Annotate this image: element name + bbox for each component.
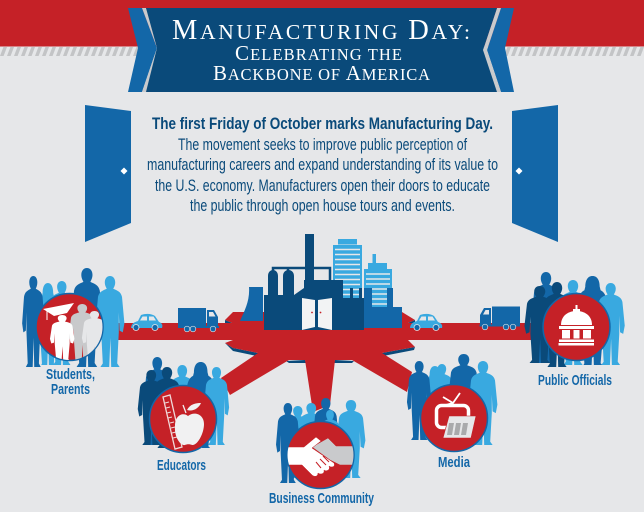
left car: [131, 314, 162, 330]
label: students, parents: Parents: [51, 381, 90, 398]
cooling tower: [240, 287, 263, 321]
title banner: [128, 8, 514, 92]
icon: students: [36, 294, 107, 364]
right open door: [512, 105, 558, 242]
red road hub: [118, 312, 535, 412]
intro text: [147, 114, 498, 215]
label: educators: Educators: [157, 457, 206, 474]
label: public officials: Public Officials: [538, 372, 612, 389]
intro text: The movement seeks to improve public perception of: [178, 135, 467, 154]
label: media: Media: [438, 454, 470, 471]
right truck: [480, 306, 520, 330]
title line 2: CELEBRATING THE: [235, 41, 402, 65]
main factory: [264, 234, 364, 330]
group: students and parents: [22, 268, 124, 398]
icon: ruler and apple: [150, 386, 216, 452]
intro text: the public through open house tours and events.: [190, 196, 455, 215]
pipes: [273, 268, 330, 280]
group: business community: [269, 398, 374, 507]
group: public officials: [524, 272, 625, 389]
factory doors: [302, 298, 332, 330]
intro text: manufacturing careers and expand understanding of its value to: [147, 155, 498, 174]
label: business community: Business Community: [269, 490, 374, 507]
intro text: The first Friday of October marks Manufacturing Day.: [152, 114, 493, 133]
red header band: [0, 0, 644, 56]
label: students, parents: Students,: [46, 366, 95, 383]
blue factory wing: [364, 288, 402, 328]
left truck: [178, 308, 219, 332]
icon: handshake: [287, 422, 354, 488]
building: short light blue: [364, 254, 392, 307]
group: educators: [138, 357, 229, 474]
right car: [410, 314, 442, 330]
building: tall light blue: [333, 239, 362, 300]
intro text: the U.S. economy. Manufacturers open their doors to educate: [155, 176, 490, 195]
icon: tv and newspaper: [420, 384, 488, 452]
title line 1: MANUFACTURING DAY:: [172, 15, 470, 46]
label: students, parents: [46, 366, 95, 398]
icon: capitol building: [543, 294, 610, 360]
factory: [240, 234, 402, 330]
title line 3: BACKBONE OF AMERICA: [213, 61, 430, 85]
group: media: [407, 354, 497, 471]
left open door: [85, 105, 131, 242]
